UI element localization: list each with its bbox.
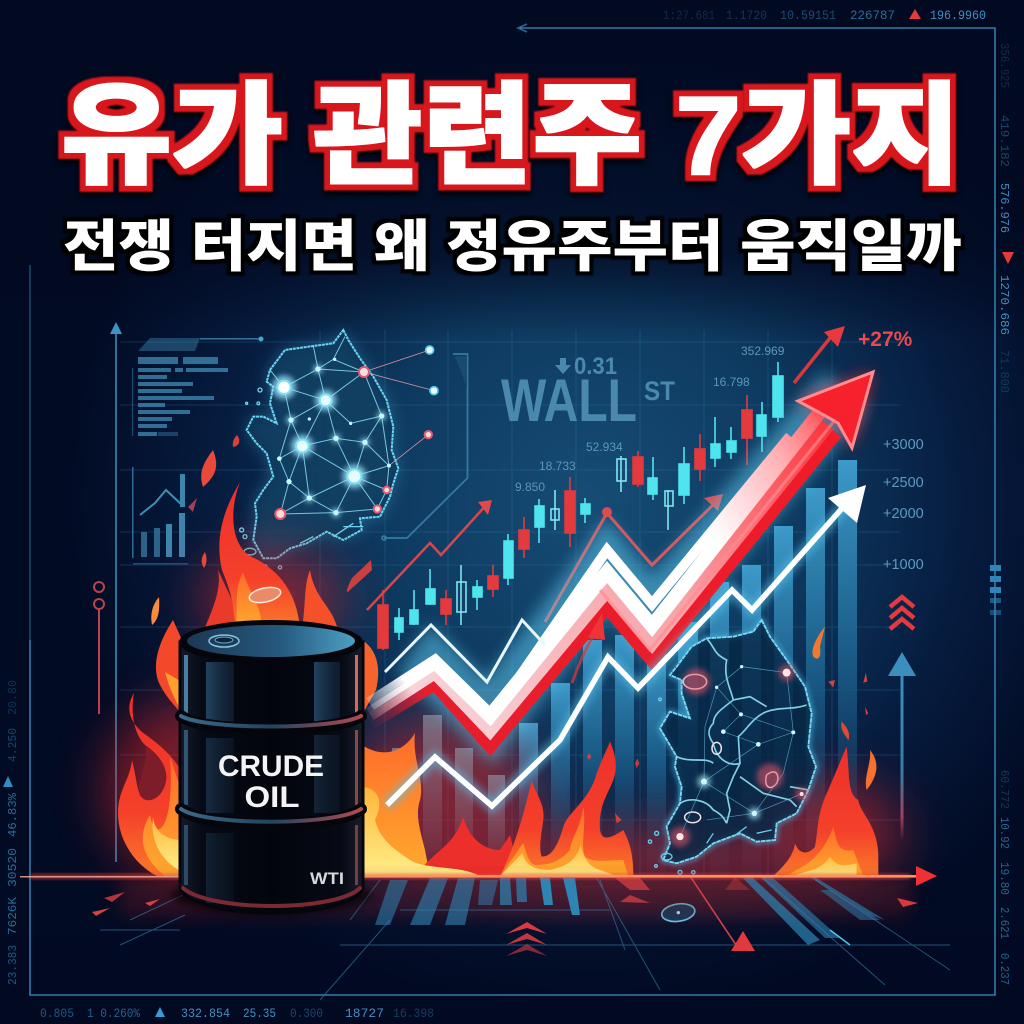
wall st label: ST [644, 376, 675, 406]
right bars [519, 460, 857, 876]
left axis arrow [110, 322, 122, 862]
left ticker [3, 680, 20, 985]
candle value labels: 52.934 [586, 440, 623, 454]
candle value labels: 18.733 [539, 459, 576, 473]
top red arrow and percentage: +27% [858, 328, 913, 351]
bottom ticker: 1 0.260% [87, 1007, 140, 1021]
sparks [92, 892, 160, 916]
right ticker: 356.925 [997, 43, 1011, 88]
chart grid [120, 330, 900, 876]
top ticker: 196.9960 [930, 9, 986, 23]
right ticker: 0.237 [997, 953, 1011, 985]
left ticker: 7626K [6, 896, 20, 935]
right ticker: 576.976 [997, 183, 1011, 233]
left ticker: 20.80 [6, 680, 20, 715]
right ticker: 19.80 [997, 862, 1011, 895]
wall st label: WALL [501, 367, 637, 434]
flame glow [105, 550, 900, 890]
title: 유가 [61, 74, 283, 198]
right ticker: 1270.686 [997, 275, 1011, 335]
right ticker: 419.182 [997, 115, 1011, 167]
bottom ticker: 0.300 [290, 1007, 323, 1021]
right ticker: 10.92 [997, 817, 1011, 849]
dim bars behind flames [392, 715, 505, 875]
axis labels [883, 437, 924, 573]
title: 7가지 [675, 74, 961, 198]
bottom ticker: 332.854 [181, 1007, 230, 1021]
bottom ticker: 18727 [345, 1007, 384, 1021]
bottom ticker: 0.805 [40, 1007, 74, 1021]
red chevrons right [890, 597, 914, 629]
top darkening behind title [0, 0, 1024, 340]
axis labels: +3000 [883, 437, 924, 453]
main red and white arrow [370, 390, 845, 744]
top ticker: 1:27.681 [663, 9, 715, 23]
left flames [118, 435, 520, 876]
candle value labels: 9.850 [515, 480, 545, 494]
axis labels: +2500 [883, 475, 924, 491]
bottom ticker [40, 1007, 434, 1021]
right ticker [997, 43, 1014, 985]
top red arrow and percentage [794, 326, 913, 383]
barrel sheen panels [206, 662, 340, 903]
candle value labels [515, 344, 785, 494]
top ticker: 226787 [850, 9, 895, 23]
barrel label: WTI [310, 869, 344, 888]
floor glow line and arrow [20, 866, 937, 886]
bottom ticker: 16.398 [393, 1007, 434, 1021]
main arrow head [798, 372, 873, 448]
small red arrow on bars [572, 613, 605, 683]
top ticker [663, 9, 986, 23]
top left map [240, 330, 438, 569]
mini chart [132, 467, 197, 564]
axis labels: +1000 [883, 557, 924, 573]
barrel hoops [181, 716, 361, 906]
title [61, 74, 961, 198]
bottom right map [648, 620, 816, 924]
bottom flames [500, 627, 878, 876]
white rising line [387, 485, 866, 806]
title: 관련주 [313, 74, 642, 198]
red thin arrow with dot [545, 494, 723, 622]
thin white line [385, 620, 545, 682]
pill icon [248, 585, 282, 605]
blue up arrow [888, 652, 916, 841]
candlestick chart [378, 362, 783, 650]
bottom ticker: 25.35 [243, 1007, 276, 1021]
right ticker: 71.800 [997, 350, 1011, 393]
bottom chevrons [506, 922, 547, 956]
bottom darkening [0, 880, 1024, 1024]
barrel lid [179, 620, 363, 664]
data panel with bars [132, 336, 264, 436]
barrel label: OIL [244, 781, 300, 814]
floor [100, 875, 950, 1000]
barrel label: CRUDE [218, 750, 324, 783]
subtitle: 전쟁 터지면 왜 정유주부터 움직일까 [63, 215, 962, 278]
top ticker: 1.1720 [726, 9, 767, 23]
left ticker: 23.383 [6, 945, 20, 985]
top ticker: 10.59151 [780, 9, 836, 23]
axis labels: +2000 [883, 506, 924, 522]
wall st label: 0.31 [574, 353, 617, 380]
red thin rising arrow left [367, 500, 492, 610]
barrel label [218, 750, 344, 888]
bracket line [382, 354, 468, 540]
right ticker: 60.772 [997, 770, 1011, 809]
left ticker: 30520 [6, 848, 20, 887]
oil barrel [171, 620, 371, 915]
right ticker: 2.621 [997, 907, 1011, 939]
red circles marker [94, 582, 104, 714]
left ticker: 4.250 [6, 728, 20, 762]
candle value labels: 352.969 [741, 344, 785, 358]
candle value labels: 16.798 [713, 375, 750, 389]
left ticker: 46.83% [6, 792, 20, 837]
right frame ticks [990, 565, 1001, 615]
